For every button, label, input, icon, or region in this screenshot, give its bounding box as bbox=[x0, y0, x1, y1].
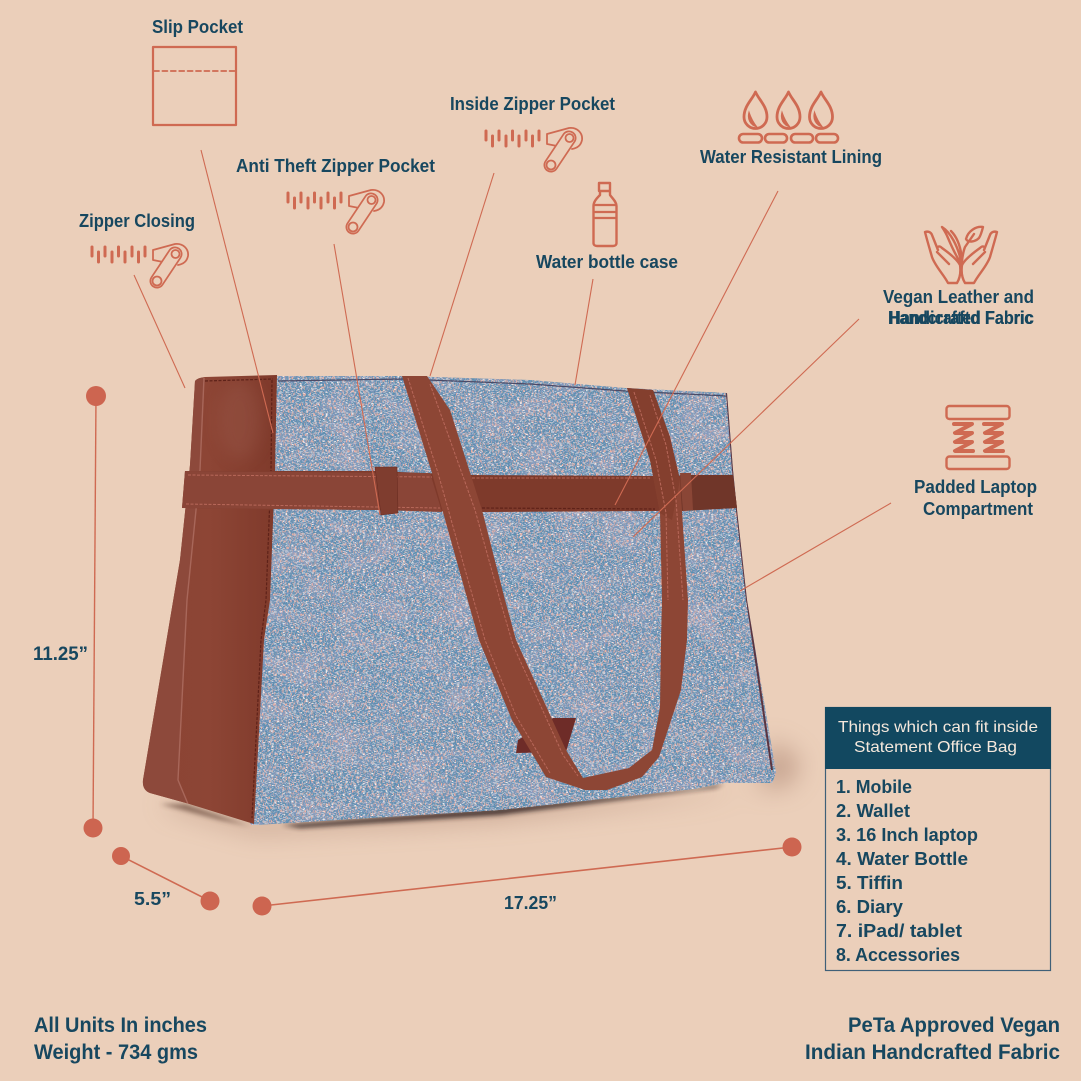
fit list bbox=[836, 777, 978, 965]
panel header: Things which can fit inside bbox=[838, 719, 1038, 736]
panel header bbox=[825, 707, 1051, 769]
vegan fabric note bbox=[805, 1014, 1060, 1064]
bag product illustration bbox=[140, 370, 800, 832]
shoulder straps bbox=[402, 376, 688, 790]
fabric front panel bbox=[245, 370, 780, 830]
fit list: 4. Water Bottle bbox=[836, 849, 968, 869]
fit list: 6. Diary bbox=[836, 897, 903, 917]
width dimension marker bbox=[252, 838, 802, 916]
icon: water bottle bbox=[594, 183, 616, 246]
fit list: 2. Wallet bbox=[836, 801, 910, 821]
fit list: 1. Mobile bbox=[836, 777, 912, 797]
icon: zipper anti theft bbox=[288, 190, 384, 232]
icon: water drops bbox=[739, 92, 838, 142]
panel header: Statement Office Bag bbox=[854, 739, 1017, 756]
anti theft heading: Anti Theft Zipper Pocket bbox=[236, 156, 435, 176]
padded laptop heading: Padded Laptop bbox=[914, 477, 1037, 497]
fit list: 7. iPad/ tablet bbox=[836, 921, 962, 941]
bag logo patch bbox=[516, 718, 576, 753]
depth dimension marker bbox=[112, 847, 220, 910]
vegan leather heading: Handcrafted Fabric bbox=[888, 308, 1033, 328]
belt keeper right bbox=[680, 473, 693, 511]
depth value: 5.5” bbox=[134, 889, 171, 909]
vegan fabric note: Indian Handcrafted Fabric bbox=[805, 1041, 1060, 1064]
fit list: 5. Tiffin bbox=[836, 873, 903, 893]
icon: zipper inside bbox=[486, 128, 582, 170]
vegan leather heading: Vegan Leather and bbox=[883, 287, 1034, 307]
panel: things which fit inside bbox=[825, 707, 1051, 970]
callout leader lines bbox=[134, 150, 891, 591]
width value: 17.25” bbox=[504, 893, 557, 913]
vegan fabric note: PeTa Approved Vegan bbox=[848, 1014, 1060, 1037]
icon: zipper closing bbox=[92, 244, 188, 286]
leather side panel bbox=[140, 370, 277, 824]
units and weight note: All Units In inches bbox=[34, 1014, 207, 1037]
water bottle heading: Water bottle case bbox=[536, 252, 678, 272]
ground shadow bbox=[160, 740, 800, 832]
icon: padded spring bbox=[946, 406, 1010, 469]
slip pocket heading: Slip Pocket bbox=[152, 17, 243, 37]
height dimension marker bbox=[84, 386, 106, 838]
padded laptop heading: Compartment bbox=[923, 499, 1033, 519]
height value: 11.25” bbox=[33, 644, 88, 665]
inside zipper heading: Inside Zipper Pocket bbox=[450, 94, 615, 114]
belt keeper left bbox=[375, 467, 398, 515]
icon: slip pocket bbox=[153, 47, 236, 125]
vegan leather heading: Handicraftd Fabric bbox=[889, 308, 1034, 328]
padded laptop heading bbox=[914, 477, 1037, 519]
water resistant heading: Water Resistant Lining bbox=[700, 147, 882, 167]
zipper closing heading: Zipper Closing bbox=[79, 211, 195, 231]
vegan leather heading bbox=[883, 287, 1034, 328]
fit list: 8. Accessories bbox=[836, 945, 960, 965]
leather belt bbox=[182, 471, 737, 512]
units and weight note: Weight - 734 gms bbox=[34, 1041, 198, 1064]
units and weight note bbox=[34, 1014, 207, 1064]
icon: hands and leaves bbox=[925, 227, 997, 283]
fit list: 3. 16 Inch laptop bbox=[836, 825, 978, 845]
